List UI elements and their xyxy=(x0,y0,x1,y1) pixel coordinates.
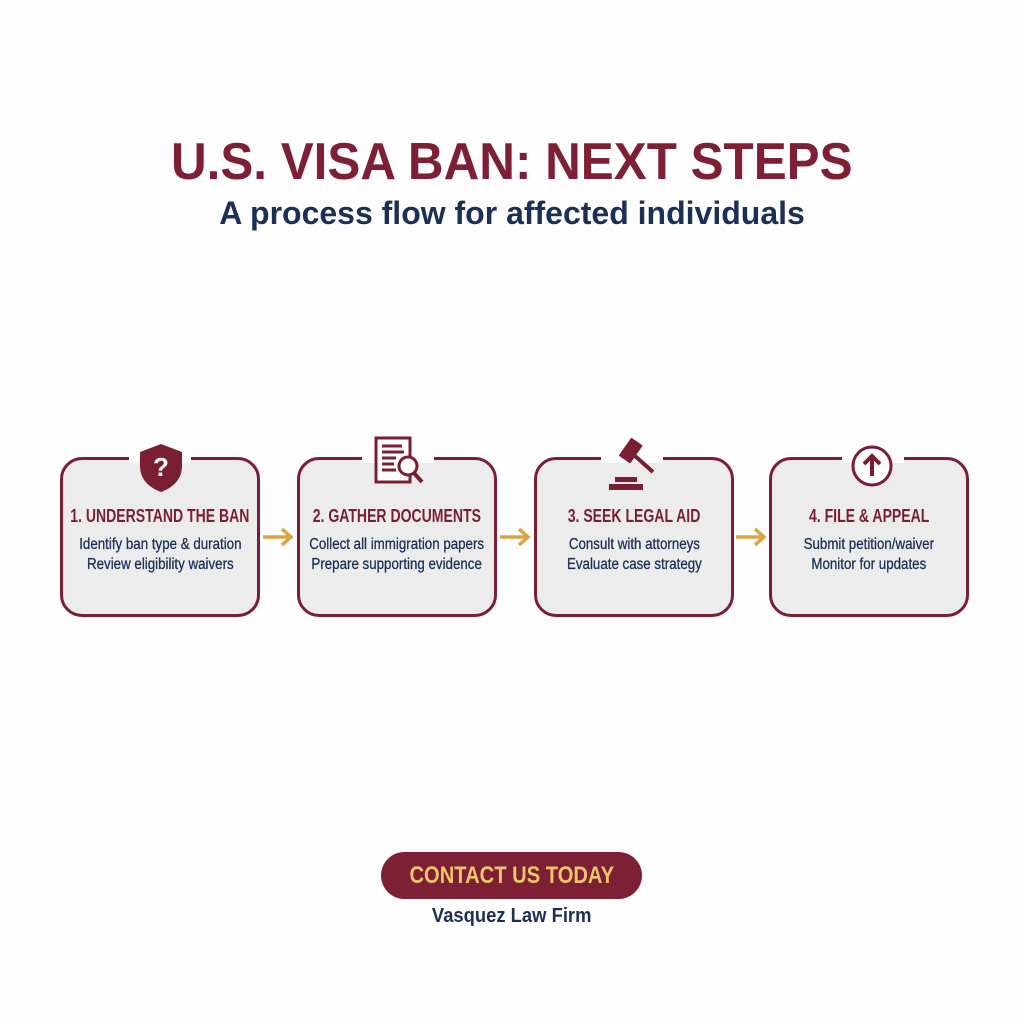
heading: 2. GATHER DOCUMENTS xyxy=(313,506,481,526)
text xyxy=(79,536,241,573)
icon: shield question xyxy=(140,444,182,492)
icon: circled up arrow xyxy=(852,446,892,486)
icon: gavel xyxy=(609,438,654,490)
text xyxy=(567,536,702,573)
text: Collect all immigration papers xyxy=(310,536,484,553)
panel: step 3 xyxy=(534,457,734,617)
text: Identify ban type & duration xyxy=(79,536,241,553)
button: contact us xyxy=(381,852,642,899)
heading: 4. FILE & APPEAL xyxy=(809,506,929,526)
icon: document search xyxy=(374,436,424,484)
subtitle: A process flow for affected individuals xyxy=(219,195,805,231)
arrow 2 xyxy=(500,528,530,546)
text: Submit petition/waiver xyxy=(804,536,934,553)
title: U.S. VISA BAN: NEXT STEPS xyxy=(171,133,853,191)
panel: step 1 xyxy=(60,457,260,617)
text: Evaluate case strategy xyxy=(567,556,701,573)
arrow 1 xyxy=(263,528,294,546)
text: Prepare supporting evidence xyxy=(312,556,482,573)
panel: step 4 xyxy=(769,457,969,617)
heading: 3. SEEK LEGAL AID xyxy=(568,506,700,526)
text: Review eligibility waivers xyxy=(87,556,233,573)
text: Monitor for updates xyxy=(812,556,926,573)
icon: shield question: ? xyxy=(153,452,169,482)
firm name: Vasquez Law Firm xyxy=(432,905,592,927)
text: Consult with attorneys xyxy=(568,536,700,553)
heading: 1. UNDERSTAND THE BAN xyxy=(70,506,250,526)
text xyxy=(310,536,484,573)
panel: step 2 xyxy=(297,457,497,617)
button: contact us: CONTACT US TODAY xyxy=(409,862,614,889)
arrow 3 xyxy=(736,528,766,546)
text xyxy=(804,536,934,573)
